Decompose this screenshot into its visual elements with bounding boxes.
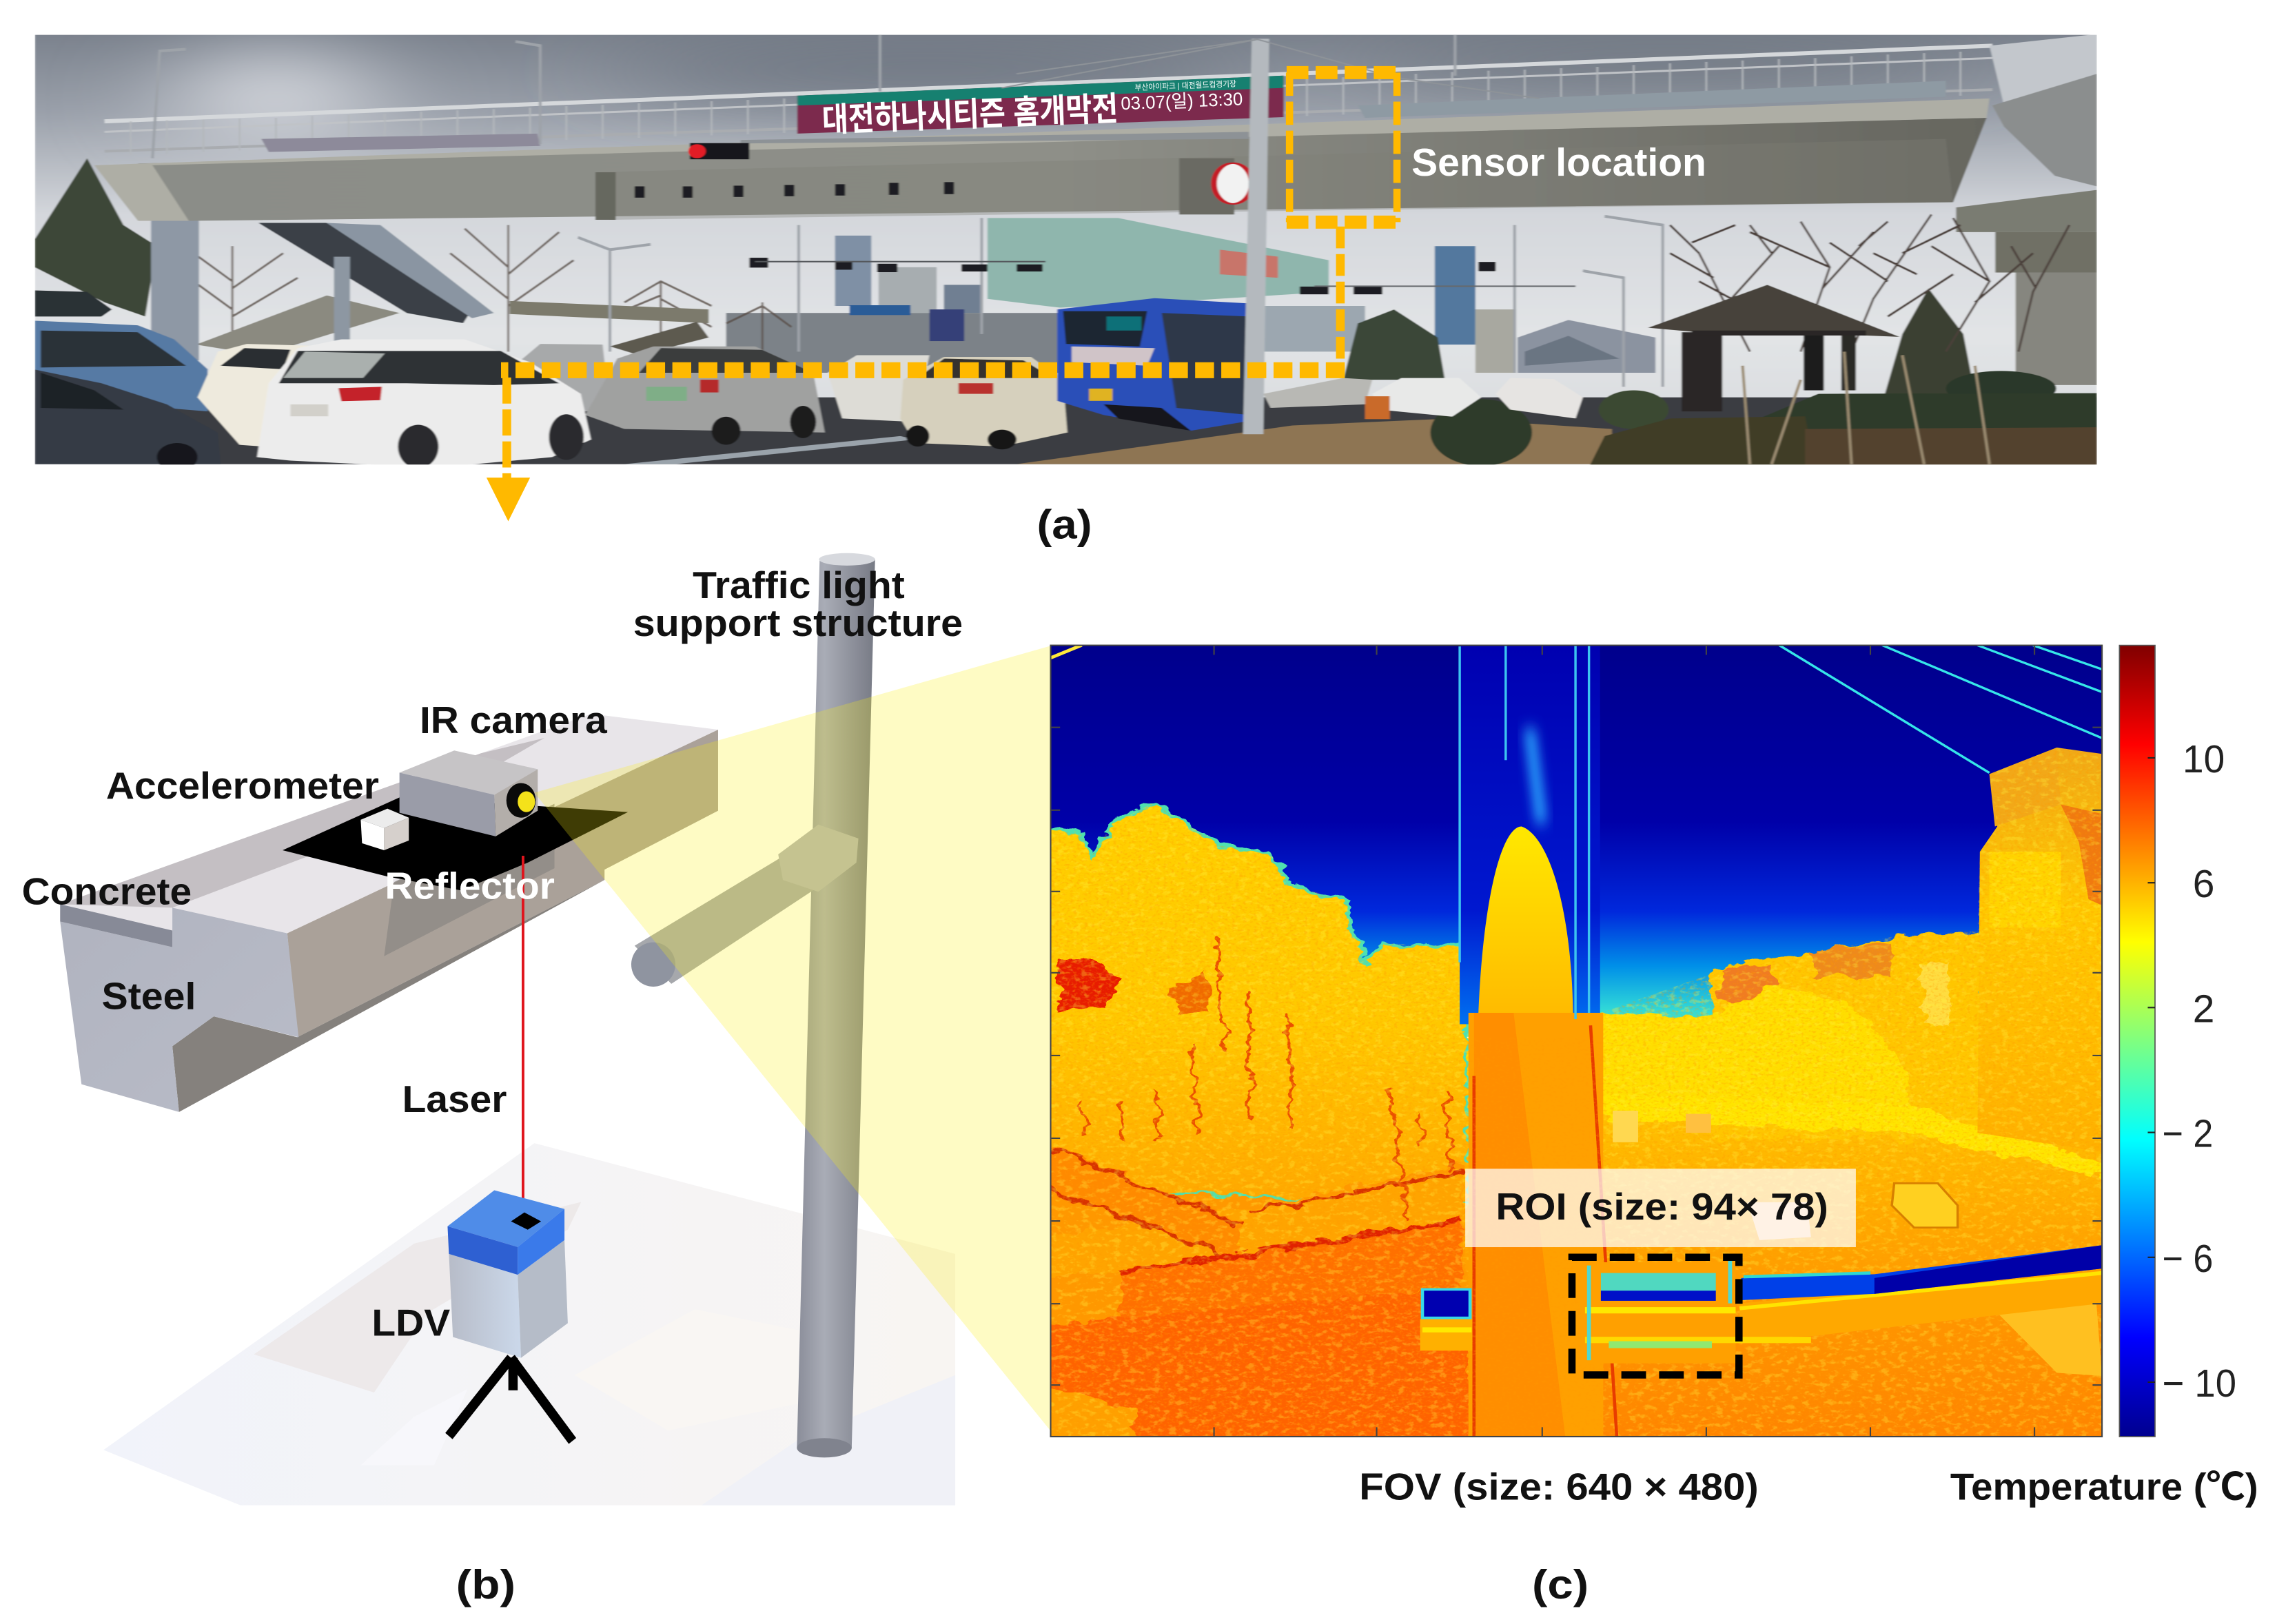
thermal pole — [1460, 645, 1617, 1436]
thermal left tree canopy — [1018, 803, 1470, 1202]
dashed box sides — [1289, 72, 1397, 222]
yellow field-of-view cone — [534, 646, 1050, 1430]
second overpass — [510, 301, 708, 323]
LDV unit — [447, 1190, 568, 1358]
thermal signal arm — [1739, 1245, 2102, 1338]
label: LDV: LDV — [371, 1302, 451, 1344]
steel girder end — [60, 907, 298, 1112]
label: traffic light support structure: support structure — [633, 602, 963, 644]
dashed sensor location box — [1287, 72, 1400, 222]
caption b: (b) — [456, 1562, 515, 1607]
label: traffic light support structure — [633, 564, 963, 644]
background glass building — [988, 218, 1329, 308]
colorbar tick labels: 6 — [2193, 862, 2214, 906]
caption a: (a) — [1037, 502, 1092, 548]
label: sensor location: Sensor location — [1411, 141, 1706, 185]
photo banner — [797, 76, 1284, 134]
gray car at back — [518, 344, 610, 411]
colorbar tick labels: − 2 — [2163, 1112, 2213, 1156]
thermal mottled texture — [1050, 748, 2102, 1436]
thermal vehicles — [1613, 1111, 2102, 1376]
beam top surface — [60, 714, 718, 934]
thermal sky — [1050, 645, 2102, 1037]
panel b: 3D schematic of the sensor installation — [22, 553, 1050, 1505]
thermal ground left — [1018, 1133, 1474, 1455]
photo: banner text: 부산아이파크 | 대전월드컵경기장 — [1134, 79, 1236, 92]
colorbar tick labels: − 6 — [2163, 1237, 2213, 1281]
thermal base under land — [1034, 1139, 2128, 1455]
gazebo — [1648, 285, 1899, 411]
street lamps and poles — [152, 35, 1663, 387]
shrubs and grass — [1017, 351, 2097, 468]
signals at intersection — [749, 258, 1575, 294]
thermal wires — [1779, 645, 2102, 773]
thermal road — [1462, 1038, 2144, 1468]
tripod — [449, 1358, 573, 1441]
label: accelerometer: Accelerometer — [106, 764, 379, 807]
left support column — [151, 220, 199, 360]
traffic light arm — [741, 132, 1249, 143]
blue bus — [1057, 298, 1263, 431]
label: steel: Steel — [102, 974, 196, 1017]
IR camera — [400, 750, 538, 836]
thermal right building — [1977, 748, 2102, 1152]
reflector plate — [283, 797, 628, 890]
photo: banner text: 03.07(일) 13:30 — [1121, 88, 1243, 114]
left pine tree — [35, 158, 157, 316]
ROI dashed box — [1572, 1257, 1739, 1375]
label: temperature unit: Temperature (℃) — [1950, 1466, 2258, 1508]
label: field of view: FOV (size: 640 × 480) — [1359, 1466, 1759, 1508]
ground plane — [103, 1143, 955, 1505]
traffic signal — [690, 143, 749, 159]
distant mid-ground strip — [726, 305, 1445, 380]
gray SUV — [585, 347, 825, 445]
label: reflector: Reflector — [385, 864, 555, 907]
beige SUV — [900, 357, 1068, 449]
temperature colorbar — [2119, 646, 2236, 1437]
bridge railing — [105, 45, 1992, 155]
beam lower flange — [172, 880, 604, 1112]
label: laser: Laser — [402, 1078, 507, 1120]
panel c: thermal infrared image — [1018, 645, 2144, 1468]
thermal hot patches — [1058, 937, 1450, 1221]
right pier and stair end — [1956, 34, 2097, 385]
accelerometer block — [360, 809, 409, 850]
ROI label: ROI (size: 94× 78) — [1495, 1185, 1828, 1228]
staircase — [196, 223, 493, 355]
colorbar tick labels — [2163, 737, 2236, 1406]
colorbar tick labels: 10 — [2183, 737, 2225, 781]
distant cars — [1263, 378, 1583, 419]
colorbar ramp — [2119, 646, 2155, 1437]
white minivan — [257, 339, 591, 469]
signal arm — [631, 825, 859, 987]
laser beam — [522, 856, 524, 1222]
clearance sign — [1214, 163, 1252, 204]
right-side evergreen and bare trees — [1670, 214, 2070, 394]
thermal central trees and buildings — [1601, 931, 2102, 1177]
bridge beam — [60, 714, 718, 1112]
label: traffic light support structure: Traffic light — [693, 564, 905, 606]
colorbar tick labels: − 10 — [2163, 1361, 2236, 1406]
dashed horizontal leader — [501, 367, 1345, 374]
beam side — [287, 730, 718, 1037]
label: concrete: Concrete — [22, 870, 192, 913]
caption c: (c) — [1532, 1562, 1589, 1607]
callout: yellow dashed leader from sensor to diagram — [487, 72, 1400, 521]
photo: banner text: 대전하나시티즌 홈개막전 — [821, 90, 1119, 139]
support pole — [797, 553, 875, 1457]
colorbar tick labels: 2 — [2193, 987, 2214, 1031]
white sedan — [828, 355, 930, 422]
panel a: roadside photo of pedestrian bridge — [35, 34, 2097, 471]
label: IR camera: IR camera — [420, 699, 607, 741]
thermal axes frame and ticks — [1051, 646, 2102, 1437]
thermal small signal box — [1420, 1289, 1473, 1350]
roof box and dark cars — [35, 291, 221, 471]
photo: banner text — [821, 79, 1244, 139]
dashed drop leader — [504, 378, 509, 482]
concrete deck edge — [60, 904, 172, 947]
background towers — [835, 236, 1655, 373]
main beam of bridge — [138, 118, 1987, 220]
dashed vertical leader — [1338, 227, 1342, 370]
thermal signal head inside ROI — [1581, 1259, 1811, 1364]
cream car behind — [198, 344, 334, 449]
ROI label background — [1465, 1169, 1856, 1247]
road — [35, 398, 2097, 464]
thermal land masses — [1018, 803, 2144, 1468]
main signal pole — [1243, 39, 1269, 434]
photo sky — [35, 34, 2097, 464]
bare trees behind the bridge — [174, 225, 791, 351]
arrowhead — [487, 477, 530, 521]
beam vent holes — [635, 182, 954, 198]
